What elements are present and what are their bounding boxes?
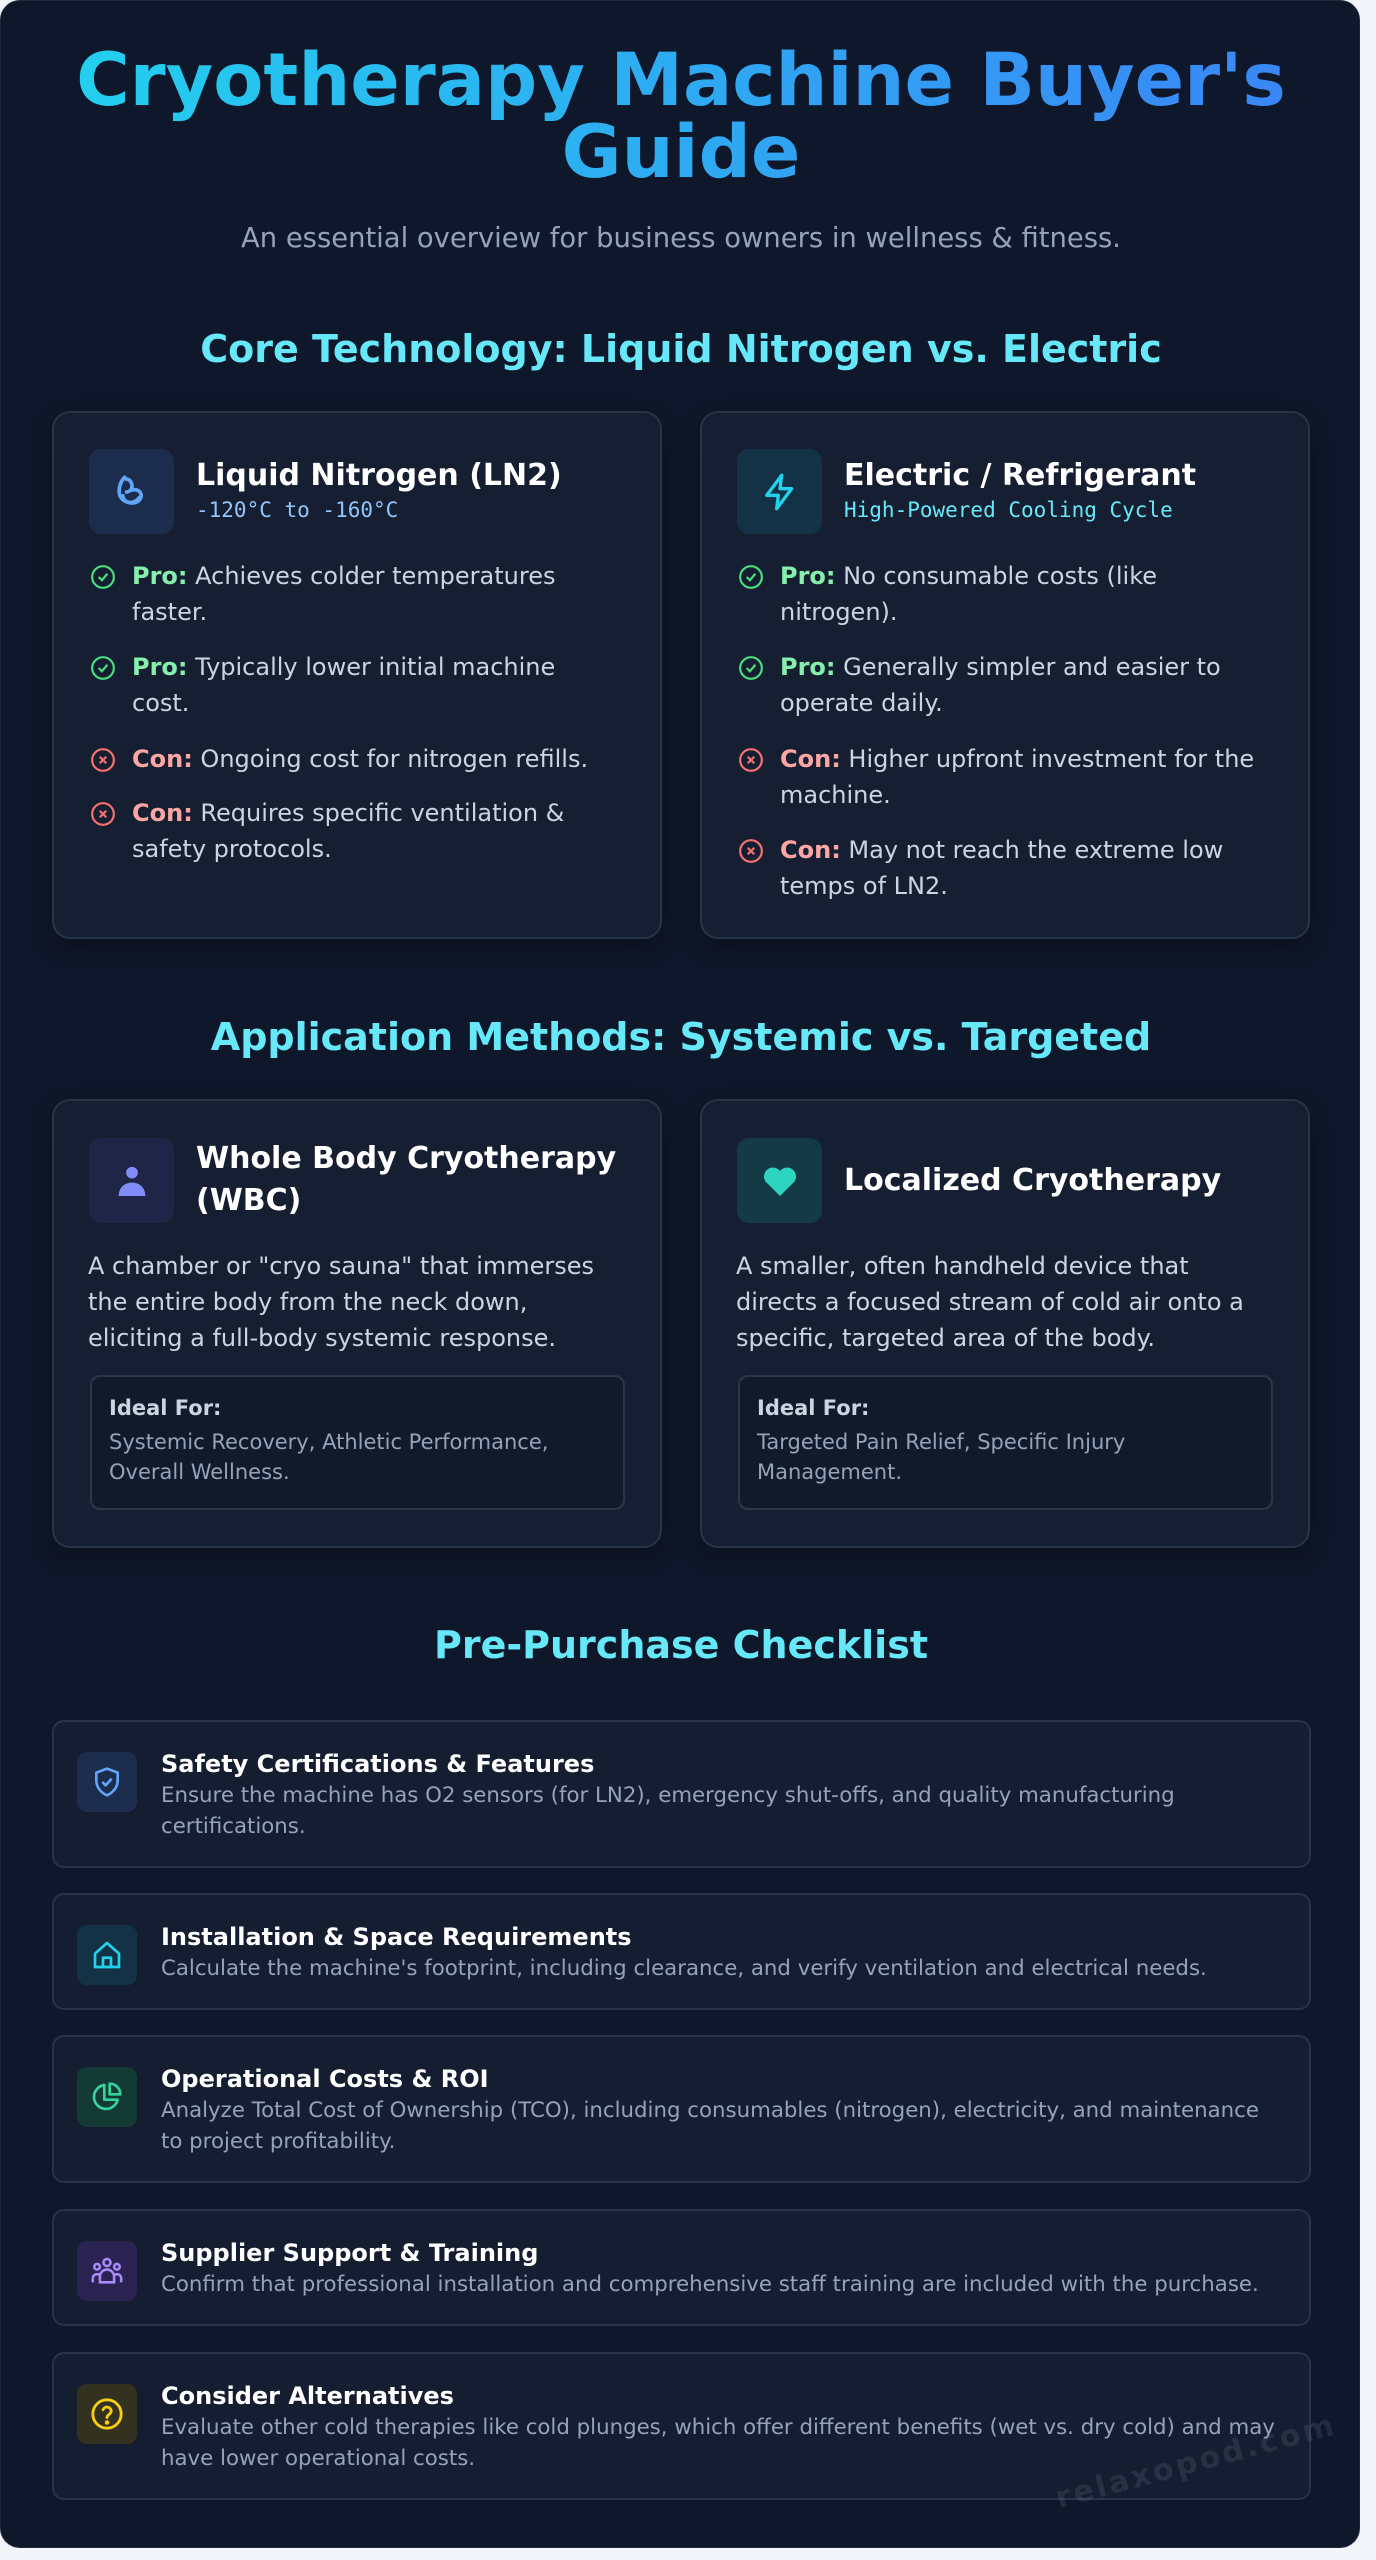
panel: electric — [700, 411, 1310, 939]
panel: liquid nitrogen — [52, 411, 662, 939]
cycle label: High-Powered Cooling Cycle — [844, 498, 1173, 522]
heading: application methods: Application Methods: Systemic vs. Targeted — [211, 1015, 1151, 1059]
checklist: support: Supplier Support & Training — [161, 2239, 538, 2267]
icon: person — [89, 1138, 174, 1223]
card title: Liquid Nitrogen (LN2) — [196, 458, 562, 493]
description: A smaller, often handheld device that directs a focused stream of cold air onto a specific, targeted area of the body. — [736, 1252, 1244, 1352]
ideal for box: Ideal For: — [757, 1396, 869, 1420]
card title: Whole Body Cryotherapy (WBC) — [196, 1141, 616, 1218]
checklist: safety — [52, 1720, 1311, 1868]
watermark: relaxopod.com — [1052, 2407, 1340, 2516]
ideal for box — [90, 1375, 625, 1510]
temperature range: -120°C to -160°C — [196, 498, 398, 522]
icon: pie chart — [77, 2067, 137, 2127]
checklist: support — [52, 2209, 1311, 2326]
icon: shield — [77, 1752, 137, 1812]
icon: heart — [737, 1138, 822, 1223]
description: A chamber or "cryo sauna" that immerses the entire body from the neck down, eliciting a full-body systemic response. — [88, 1252, 594, 1352]
panel: whole body — [52, 1099, 662, 1548]
checklist: support: Confirm that professional installation and comprehensive staff training are included with the purchase. — [161, 2272, 1259, 2297]
checklist: costs: Analyze Total Cost of Ownership (TCO), including consumables (nitrogen), electricity, and maintenance to project profitability. — [161, 2098, 1259, 2154]
checklist: installation: Installation & Space Requirements — [161, 1923, 632, 1951]
ideal for box — [738, 1375, 1273, 1510]
icon: question — [77, 2384, 137, 2444]
pro 1: Pro: No consumable costs (like nitrogen). — [780, 562, 1157, 626]
checklist: alternatives: Consider Alternatives — [161, 2382, 454, 2410]
icon: lightning — [737, 449, 822, 534]
subtitle: An essential overview for business owners in wellness & fitness. — [241, 223, 1121, 254]
con 2: Con: Requires specific ventilation & safety protocols. — [132, 799, 564, 863]
card title: Localized Cryotherapy — [844, 1163, 1221, 1198]
heading: checklist: Pre-Purchase Checklist — [434, 1623, 928, 1667]
ideal for box: Targeted Pain Relief, Specific Injury Management. — [757, 1430, 1125, 1484]
checklist: costs — [52, 2035, 1311, 2183]
checklist: alternatives — [52, 2352, 1311, 2500]
checklist: installation — [52, 1893, 1311, 2010]
con 1: Con: Higher upfront investment for the machine. — [780, 745, 1254, 809]
pro 2: Pro: Generally simpler and easier to operate daily. — [780, 653, 1221, 717]
checklist: installation: Calculate the machine's footprint, including clearance, and verify ventilation and electrical needs. — [161, 1956, 1207, 1981]
pro 1: Pro: Achieves colder temperatures faster. — [132, 562, 555, 626]
title: Guide — [562, 110, 800, 195]
panel: localized — [700, 1099, 1310, 1548]
ideal for box: Systemic Recovery, Athletic Performance, Overall Wellness. — [109, 1430, 548, 1484]
heading: core technology: Core Technology: Liquid Nitrogen vs. Electric — [200, 327, 1162, 371]
ideal for box: Ideal For: — [109, 1396, 221, 1420]
icon: nitrogen — [89, 449, 174, 534]
checklist: alternatives: Evaluate other cold therapies like cold plunges, which offer different benefits (wet vs. dry cold) and may have lower operational costs. — [161, 2415, 1275, 2471]
checklist: costs: Operational Costs & ROI — [161, 2065, 489, 2093]
icon: house — [77, 1925, 137, 1985]
title: Cryotherapy Machine Buyer's — [76, 38, 1286, 123]
card title: Electric / Refrigerant — [844, 458, 1196, 493]
title — [1, 45, 1361, 189]
con 1: Con: Ongoing cost for nitrogen refills. — [132, 745, 588, 773]
con 2: Con: May not reach the extreme low temps of LN2. — [780, 836, 1223, 900]
pro 2: Pro: Typically lower initial machine cost. — [132, 653, 555, 717]
checklist: safety: Safety Certifications & Features — [161, 1750, 594, 1778]
icon: people — [77, 2241, 137, 2301]
checklist: safety: Ensure the machine has O2 sensors (for LN2), emergency shut-offs, and quality manufacturing certifications. — [161, 1783, 1175, 1839]
